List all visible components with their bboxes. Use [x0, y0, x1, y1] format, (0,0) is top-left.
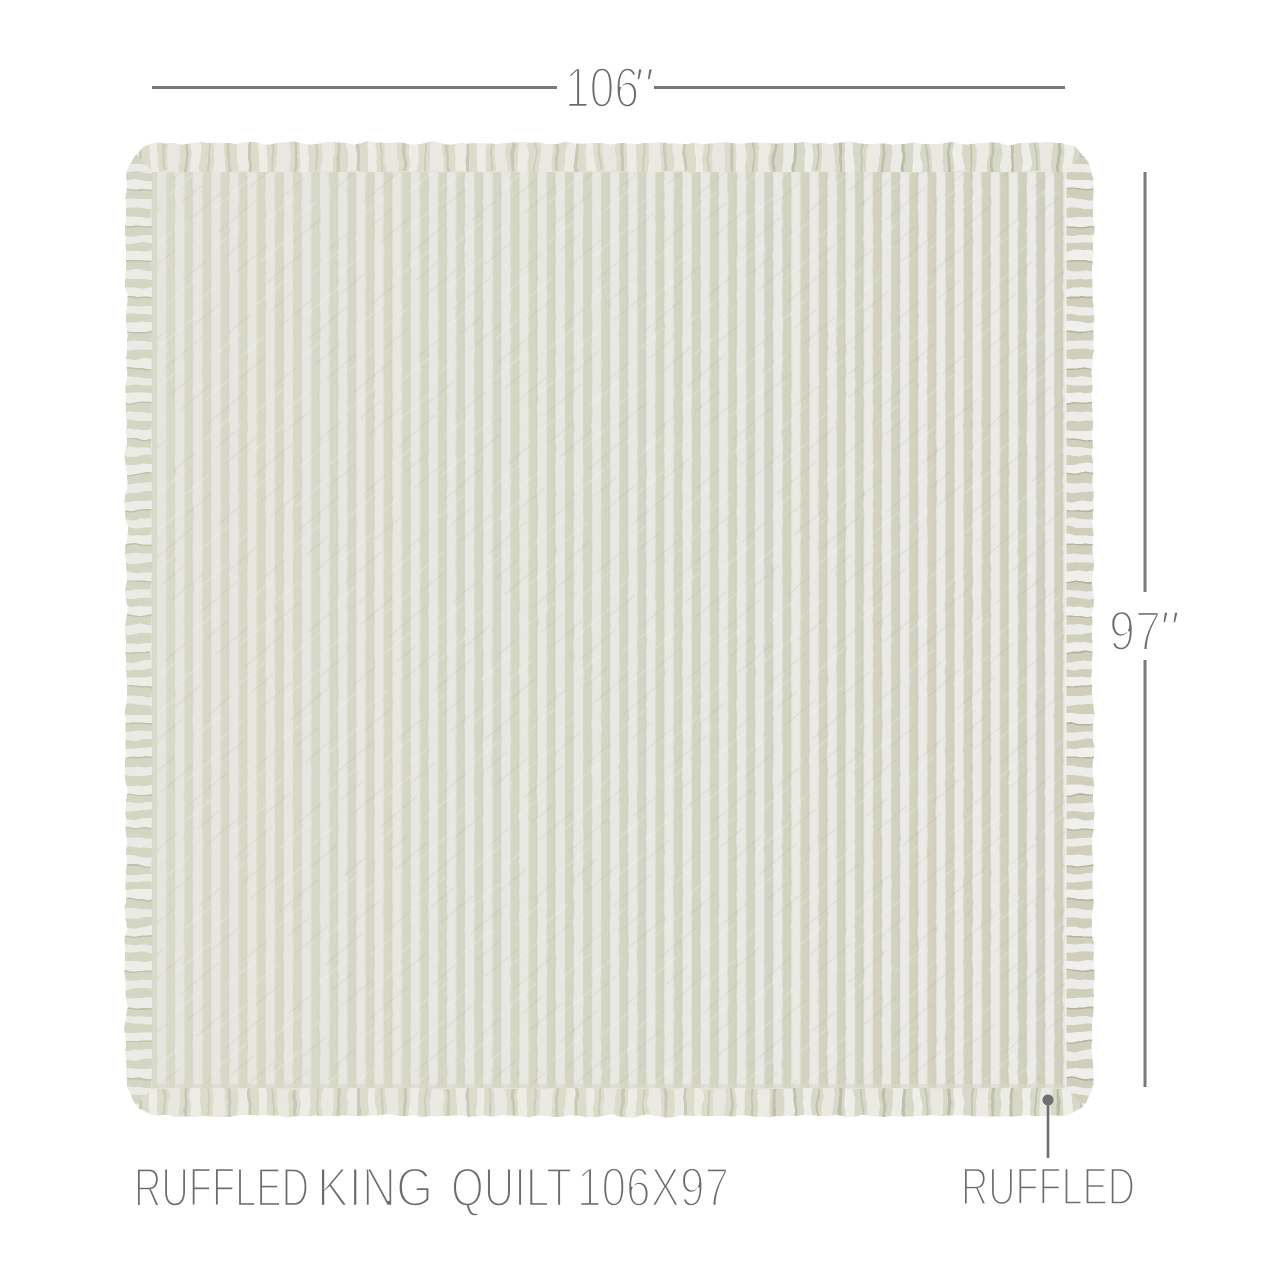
infographic canvas: [124, 68, 1178, 1216]
panel: quilt: [126, 143, 1093, 1116]
width dimension: 106 inches: 106: [565, 56, 639, 120]
quilt striped body: [152, 172, 1066, 1088]
quilt ruffled border: [126, 143, 1093, 1116]
product title: QUILT: [451, 1156, 572, 1218]
product title: RUFFLED: [134, 1156, 309, 1218]
height dimension: 97 inches: [1109, 172, 1179, 1087]
height dimension: 97 inches: ": [1157, 599, 1179, 662]
height dimension: 97 inches: 97: [1109, 599, 1161, 662]
callout: ruffled edge: RUFFLED: [961, 1158, 1135, 1216]
width dimension: 106 inches: [152, 56, 1065, 120]
product title: 106X97: [577, 1156, 729, 1218]
product title: [134, 1156, 729, 1218]
width dimension: 106 inches: ": [631, 56, 654, 120]
callout: ruffled edge: [961, 1094, 1135, 1216]
product title: KING: [317, 1156, 433, 1218]
